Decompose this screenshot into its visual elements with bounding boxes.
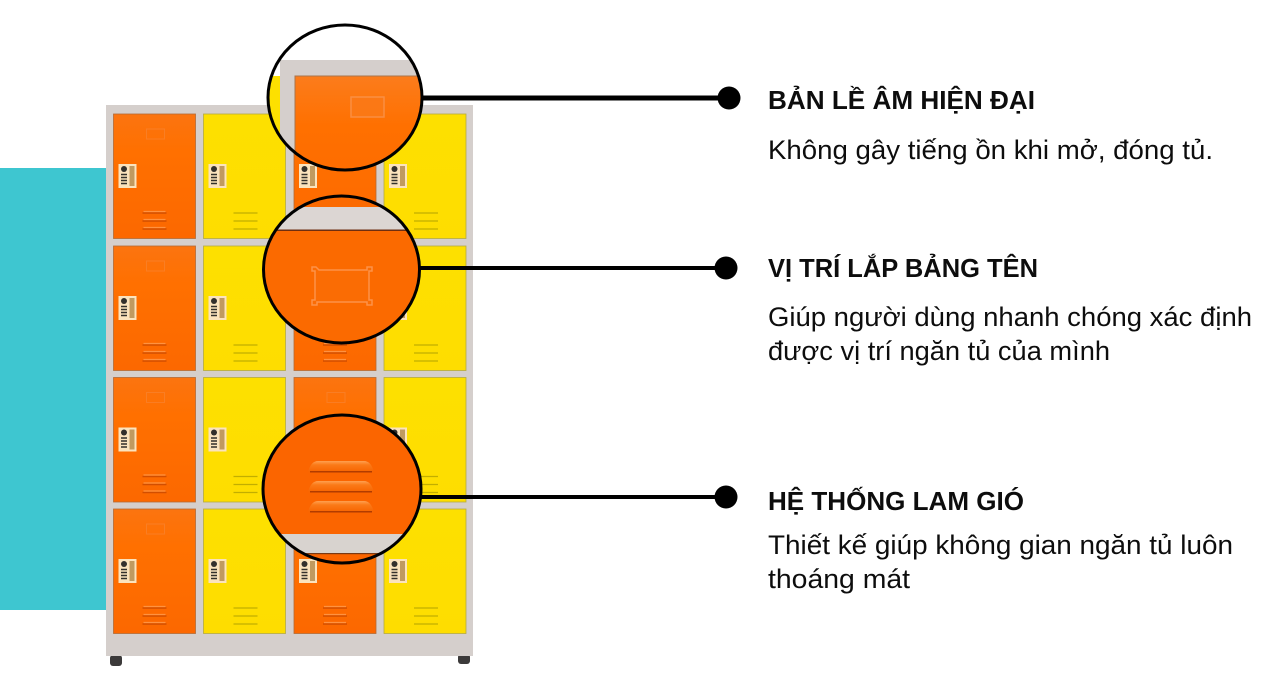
callout line 2 [418, 256, 738, 280]
text block: ventilation [768, 486, 1233, 594]
description: name plate: được vị trí ngăn tủ của mình [768, 336, 1110, 366]
callout line 1 [420, 86, 740, 110]
magnifier: name plate [262, 194, 421, 344]
cabinet feet [110, 654, 470, 666]
row 4 doors [114, 509, 466, 634]
magnifier: ventilation louvers [262, 414, 422, 564]
description: ventilation: thoáng mát [768, 564, 911, 594]
heading: concealed hinge: BẢN LỀ ÂM HIỆN ĐẠI [768, 85, 1035, 115]
callout line 3 [419, 486, 738, 508]
teal background panel [0, 168, 107, 610]
row 3 doors [114, 378, 466, 502]
heading: name plate: VỊ TRÍ LẮP BẢNG TÊN [768, 253, 1038, 283]
description: name plate: Giúp người dùng nhanh chóng xác định [768, 302, 1252, 332]
magnifier: concealed hinge [266, 24, 424, 172]
row 1 doors [114, 114, 466, 238]
cabinet frame [106, 105, 473, 656]
description: concealed hinge: Không gây tiếng ồn khi mở, đóng tủ. [768, 135, 1213, 165]
text block: concealed hinge [768, 85, 1213, 165]
locker cabinet [106, 105, 473, 666]
heading: ventilation: HỆ THỐNG LAM GIÓ [768, 486, 1024, 516]
description: ventilation: Thiết kế giúp không gian ngăn tủ luôn [768, 530, 1233, 560]
row 2 doors [114, 246, 466, 370]
text block: name plate [768, 253, 1252, 366]
